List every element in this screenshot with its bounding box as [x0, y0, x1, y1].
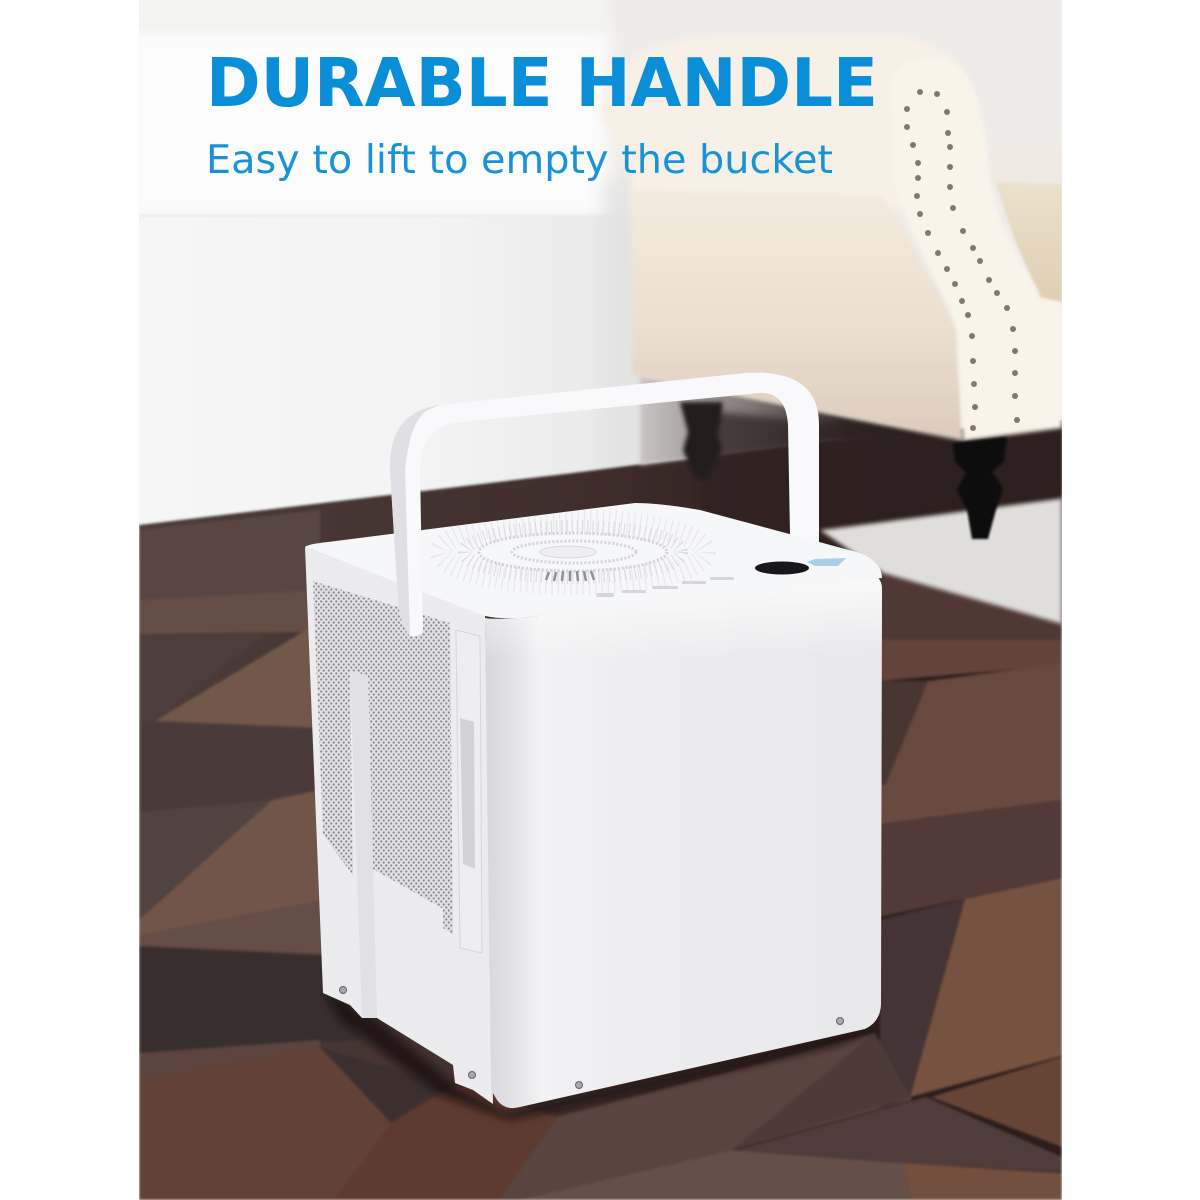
- front chair leg: [953, 437, 1007, 539]
- carry handle: [390, 373, 819, 636]
- title: DURABLE HANDLE: [206, 44, 878, 122]
- right seat cushion: [994, 180, 1062, 302]
- chair studs: [904, 89, 1020, 431]
- chair scrolled arm: [908, 83, 1062, 442]
- mounting screws: [340, 986, 844, 1088]
- fan grille: [441, 520, 705, 584]
- product scene infographic: [139, 0, 1062, 1200]
- soft shadow under dehumidifier: [323, 990, 880, 1120]
- unit front panel: [485, 576, 882, 1108]
- dehumidifier unit: [305, 373, 882, 1108]
- side bucket channel: [350, 670, 377, 1018]
- fan outlet slots: [546, 571, 594, 581]
- chair back: [600, 70, 658, 190]
- wood floor: [139, 420, 1062, 1200]
- back chair leg: [680, 402, 723, 478]
- unit top face: [305, 503, 882, 618]
- armchair: [600, 35, 1062, 539]
- floor rug: [820, 498, 1062, 624]
- wall background: [120, 0, 1062, 560]
- subtitle: Easy to lift to empty the bucket: [206, 138, 833, 183]
- shaded wall and floor under chair: [638, 376, 928, 468]
- unit side panel: [305, 547, 493, 1104]
- chair front face: [632, 190, 963, 441]
- side slot panel: [456, 630, 482, 953]
- side intake mesh: [313, 581, 453, 935]
- control panel display: [596, 558, 846, 597]
